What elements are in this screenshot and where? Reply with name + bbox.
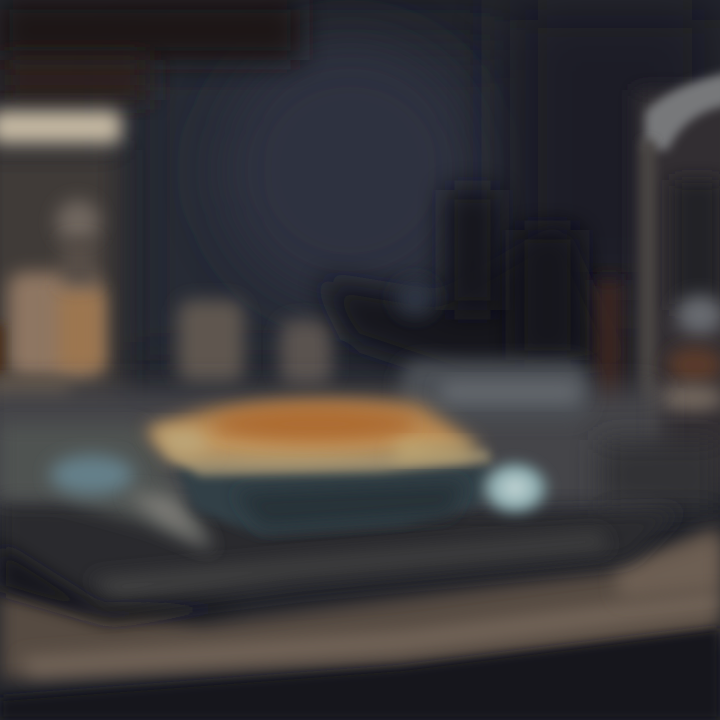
dark utensils silhouette: [320, 190, 620, 380]
under-cabinet light strip: [0, 110, 122, 144]
right window frame: [597, 72, 720, 490]
dish body: [175, 465, 490, 535]
left cabinet: [0, 150, 120, 410]
dish crust: [145, 399, 482, 461]
dark tray under dish: [0, 500, 680, 622]
back counter surface: [0, 360, 720, 513]
left cloth: [0, 425, 215, 550]
dish rim: [165, 450, 492, 476]
dark counter edge: [0, 628, 720, 720]
dish: [145, 399, 492, 535]
left jars: [0, 200, 104, 400]
counter top: [0, 525, 720, 680]
middle jars: [178, 300, 332, 388]
glowing sphere: [475, 456, 555, 520]
